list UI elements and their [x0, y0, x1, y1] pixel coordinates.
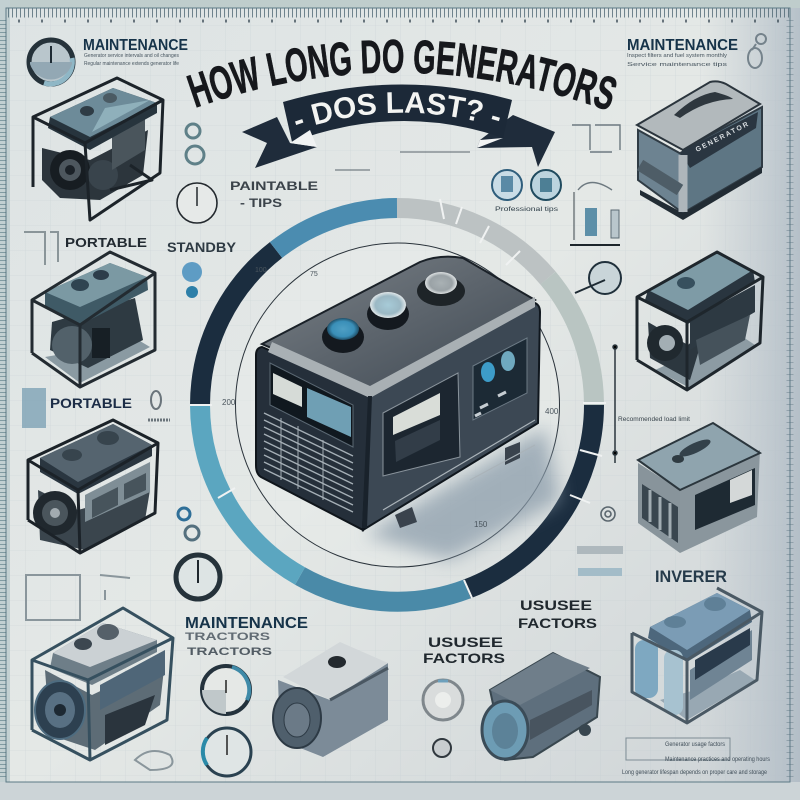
panel label: GENERATOR [695, 121, 750, 154]
right control panel two [473, 338, 527, 420]
label: maintenance top-right: Inspect filters and fuel system monthly [627, 53, 728, 59]
knob gray [417, 272, 465, 306]
label: maintenance top-left [83, 37, 188, 67]
caption: bottom-right notes [622, 738, 770, 776]
icon: person sketch [148, 391, 170, 420]
icon: building blue thumbnail [22, 388, 46, 428]
right control panel one [383, 373, 460, 476]
generator: right enclosed [638, 423, 760, 553]
sketch notes around ring: 200 [222, 398, 236, 407]
knob blue [322, 318, 364, 353]
label: usage factors upper [518, 597, 597, 631]
label: inverter: INVERER [655, 567, 727, 586]
gauge: lower-left ring [176, 555, 220, 599]
label: usage factors lower [423, 634, 505, 666]
sketch notes around ring: 150 [474, 520, 488, 529]
front edge highlight [268, 297, 535, 398]
left white display [273, 373, 302, 407]
caption: right scale: Recommended load limit [618, 417, 690, 423]
left display housing [270, 363, 353, 447]
right face [363, 303, 540, 530]
icon: small dial [433, 739, 451, 757]
label: maintenance top-right: MAINTENANCE [627, 37, 738, 54]
central generator [256, 257, 560, 560]
label: usage factors lower: USUSEE [428, 634, 503, 650]
generator: bottom-left [32, 608, 173, 760]
label: paintable tips: - TIPS [240, 196, 282, 210]
feet [395, 442, 520, 528]
digital display [393, 393, 440, 435]
icon: blue target pair [178, 508, 199, 540]
generator: right portable [637, 252, 763, 390]
generator: bottom centre-right drum [482, 653, 600, 760]
sketch icons lower-left [26, 575, 172, 770]
generator: top-left portable [33, 78, 163, 220]
icon: sketch top-left of portable [24, 232, 58, 265]
generator: top-right enclosure [637, 81, 762, 220]
vents [264, 413, 353, 512]
sketch notes around ring: 75 [310, 271, 318, 278]
label: maintenance bottom: TRACTORS [185, 631, 270, 643]
icon: valves sketch [572, 125, 620, 190]
label: usage factors upper: USUSEE [520, 597, 592, 613]
ribbon banner [242, 84, 555, 168]
sketch notes around ring: 400 [545, 407, 559, 416]
icon: blue badges [492, 170, 561, 213]
title: HOW LONG DO GENERATORS [186, 39, 616, 110]
banner text: - DOS LAST? - [295, 92, 500, 125]
label: paintable tips [230, 179, 318, 210]
gauge: tips clock [177, 183, 217, 223]
label: usage factors upper: FACTORS [518, 615, 597, 631]
generator: left portable [32, 252, 155, 387]
caption: bottom-right notes: Long generator lifespan depends on proper care and storage [622, 770, 768, 776]
icon: coil right [601, 507, 615, 521]
label: maintenance top-left: Regular maintenance extends generator life [84, 61, 179, 67]
blue dials [481, 362, 495, 382]
label: maintenance top-left: MAINTENANCE [83, 37, 188, 54]
gauge: top-left [29, 40, 73, 84]
left face [256, 347, 370, 530]
knob light [367, 292, 409, 330]
icon: inspection lens [575, 262, 621, 294]
generator: left lower portable [28, 420, 158, 553]
gauge: factor ring two [203, 728, 251, 776]
icon: wrench top-right [748, 34, 766, 68]
label: usage factors lower: FACTORS [423, 650, 505, 666]
gauge: usage factors dial [423, 680, 463, 720]
sketch notes around ring: 100 [255, 267, 267, 274]
icon: small nuts top-left [186, 124, 204, 164]
label: standby: STANDBY [167, 239, 237, 255]
generator: bottom-right inverter [632, 588, 762, 723]
left blue screen [307, 388, 351, 437]
badge caption: Professional tips [495, 207, 558, 213]
top knobs [322, 272, 465, 353]
label: portable middle: PORTABLE [50, 396, 132, 411]
caption: bottom-right notes: Generator usage factors [665, 742, 725, 748]
caption: lower-right small [577, 546, 623, 576]
top face [262, 257, 535, 390]
caption: bottom-right notes: Maintenance practices and operating hours [665, 757, 770, 763]
label: maintenance bottom [185, 615, 308, 658]
label: maintenance bottom: MAINTENANCE [185, 615, 308, 632]
generator: bottom centre drum [273, 642, 388, 757]
scale line right [613, 345, 617, 463]
label: maintenance top-left: Generator service intervals and oil changes [84, 53, 179, 59]
inner thin circle [236, 243, 560, 567]
icon: blue spheres [182, 262, 202, 298]
ground shadow [365, 428, 560, 560]
label: portable top: PORTABLE [65, 235, 147, 250]
icon: bottles [570, 192, 620, 245]
label: maintenance top-right [627, 37, 738, 68]
gauge: factor ring one [202, 666, 250, 714]
sketch notes around ring [222, 152, 559, 529]
label: maintenance top-right: Service maintenance tips [627, 62, 728, 68]
label: paintable tips: PAINTABLE [230, 179, 318, 193]
label: maintenance bottom: TRACTORS [187, 646, 272, 658]
circular timeline ring [190, 199, 606, 602]
